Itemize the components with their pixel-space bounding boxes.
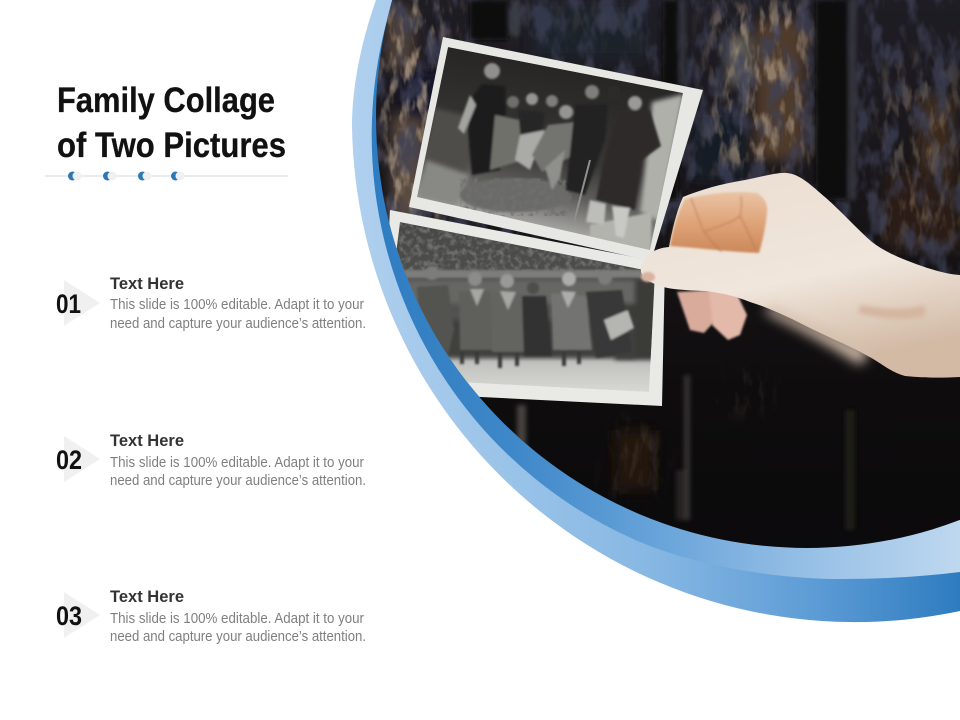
item 03 text: need and capture your audience’s attention. — [110, 629, 366, 645]
fingers behind photo — [677, 290, 747, 340]
list item 03 — [56, 587, 366, 645]
circular photo — [370, 0, 960, 560]
number badge 03 — [56, 592, 100, 638]
number badge 01 — [56, 280, 100, 326]
list item 01 — [56, 274, 366, 332]
number badge 01: 01 — [56, 289, 81, 319]
list item 02 — [56, 431, 366, 489]
item 01 text — [110, 274, 366, 332]
standing people — [458, 63, 661, 238]
number badge 02 — [56, 436, 100, 482]
number badge 02: 02 — [56, 445, 82, 475]
item 01 text: Text Here — [110, 274, 184, 293]
back photograph: family on bench — [380, 210, 665, 406]
item 03 text: Text Here — [110, 587, 184, 606]
item 03 text: This slide is 100% editable. Adapt it to your — [110, 611, 364, 627]
wood background — [370, 0, 960, 560]
hand holding photographs — [641, 173, 960, 378]
number badge 03: 03 — [56, 601, 82, 631]
flowers — [460, 178, 570, 212]
item 03 text — [110, 587, 366, 645]
item 02 text: This slide is 100% editable. Adapt it to your — [110, 455, 364, 471]
outer blue ring — [352, 0, 960, 622]
inner blue ring — [372, 0, 960, 579]
item 01 text: need and capture your audience’s attention. — [110, 316, 366, 332]
title: of Two Pictures — [57, 126, 286, 165]
palm creases — [691, 196, 756, 252]
palm shadow — [670, 192, 767, 253]
item 02 text: Text Here — [110, 431, 184, 450]
title divider with dots — [45, 172, 288, 180]
seated people — [417, 266, 634, 368]
item 02 text: need and capture your audience’s attention. — [110, 473, 366, 489]
back of hand and thumb — [641, 173, 960, 378]
item 02 text — [110, 431, 366, 489]
title: Family Collage — [57, 81, 275, 120]
item 01 text: This slide is 100% editable. Adapt it to your — [110, 297, 364, 313]
front photograph: family standing — [409, 37, 703, 261]
title — [57, 81, 286, 165]
